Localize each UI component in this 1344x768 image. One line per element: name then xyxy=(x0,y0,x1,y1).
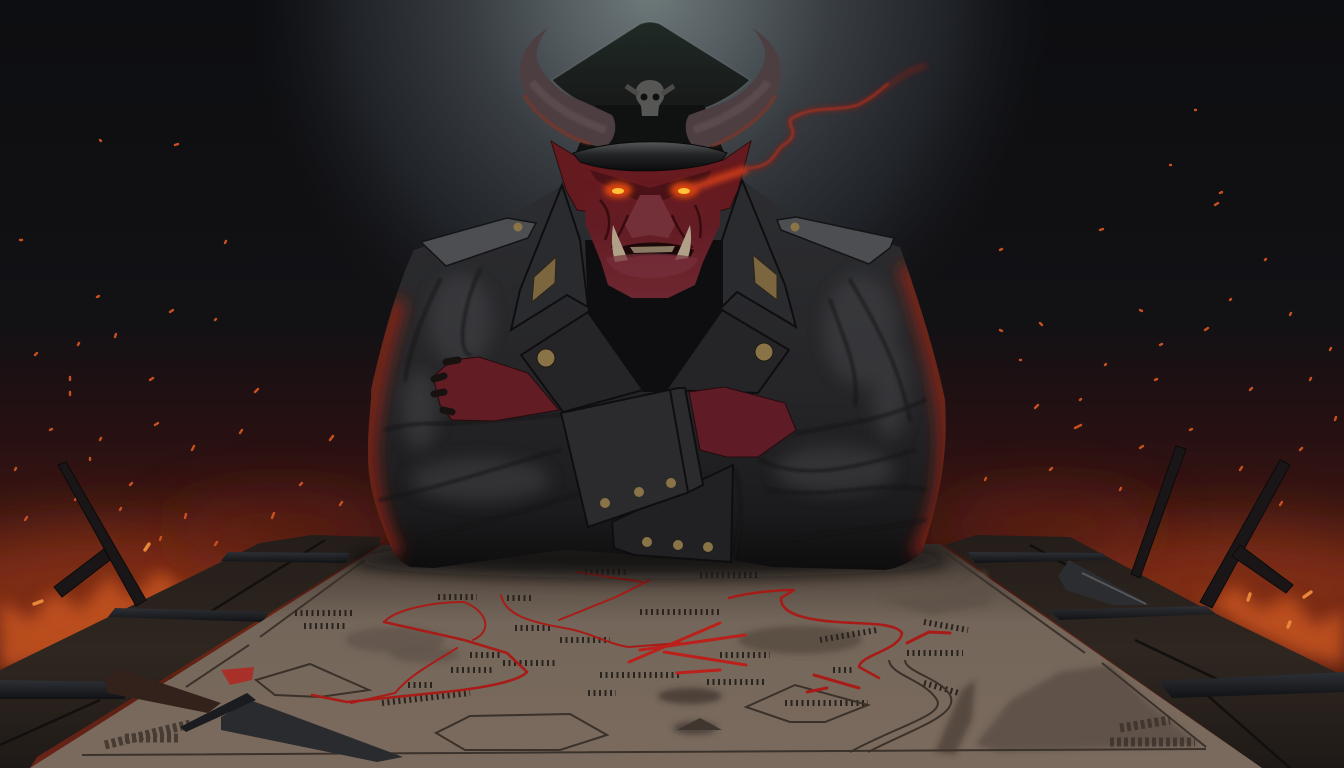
right collar xyxy=(722,180,796,327)
map mountains xyxy=(677,718,722,730)
band xyxy=(576,105,724,152)
hat: officer cap with horns xyxy=(520,22,781,171)
scars and creases xyxy=(600,200,701,248)
red rim light xyxy=(368,265,947,555)
face xyxy=(582,155,722,298)
cuff strip xyxy=(670,390,688,492)
flames xyxy=(0,570,1344,670)
table straps xyxy=(0,552,1344,699)
map red routes xyxy=(312,572,950,703)
map terrain stains xyxy=(345,570,1200,755)
teeth xyxy=(630,246,675,253)
right horn xyxy=(686,28,781,150)
nose xyxy=(625,195,675,238)
head: red demon face xyxy=(551,141,751,298)
figure: demon officer xyxy=(368,180,947,570)
brow xyxy=(590,170,712,200)
tusks xyxy=(612,225,691,262)
right epaulette xyxy=(777,217,894,264)
eyes xyxy=(604,182,698,198)
skull badge xyxy=(626,80,674,116)
visor xyxy=(573,142,727,171)
map shadow from arms xyxy=(350,542,950,578)
stakes: left and right crossed posts xyxy=(54,446,1293,608)
mouth xyxy=(612,242,694,260)
right hand xyxy=(689,387,796,457)
lower sleeve xyxy=(612,465,733,562)
left horn xyxy=(520,28,615,148)
coat fold lines xyxy=(378,268,928,524)
map border xyxy=(82,553,1206,755)
right lower lapel xyxy=(666,310,789,393)
dagger: lower left blade on table xyxy=(104,669,403,762)
left lower lapel xyxy=(521,312,643,412)
coat: torso and arms xyxy=(368,180,946,570)
table: dark wooden planks xyxy=(0,535,1344,768)
left epaulette xyxy=(421,218,536,266)
map: parchment battle map xyxy=(30,542,1262,768)
claws xyxy=(434,360,458,412)
insignia and buttons xyxy=(514,222,800,367)
left hand xyxy=(433,357,559,421)
turtleneck xyxy=(585,240,722,392)
map forts xyxy=(256,660,951,752)
map tree rows xyxy=(295,572,968,703)
coat shading xyxy=(368,265,947,562)
lower lip xyxy=(606,254,698,278)
left collar xyxy=(511,185,588,330)
map flag xyxy=(221,667,254,685)
cuff xyxy=(561,388,703,527)
crown xyxy=(552,22,750,110)
ears xyxy=(551,141,590,212)
baton: right side metal tube xyxy=(1058,560,1150,605)
coat highlights xyxy=(402,274,908,502)
smoke: red flame trail from the eye xyxy=(695,66,925,187)
map corner ornaments xyxy=(105,720,1195,745)
cuff buttons xyxy=(600,478,713,552)
